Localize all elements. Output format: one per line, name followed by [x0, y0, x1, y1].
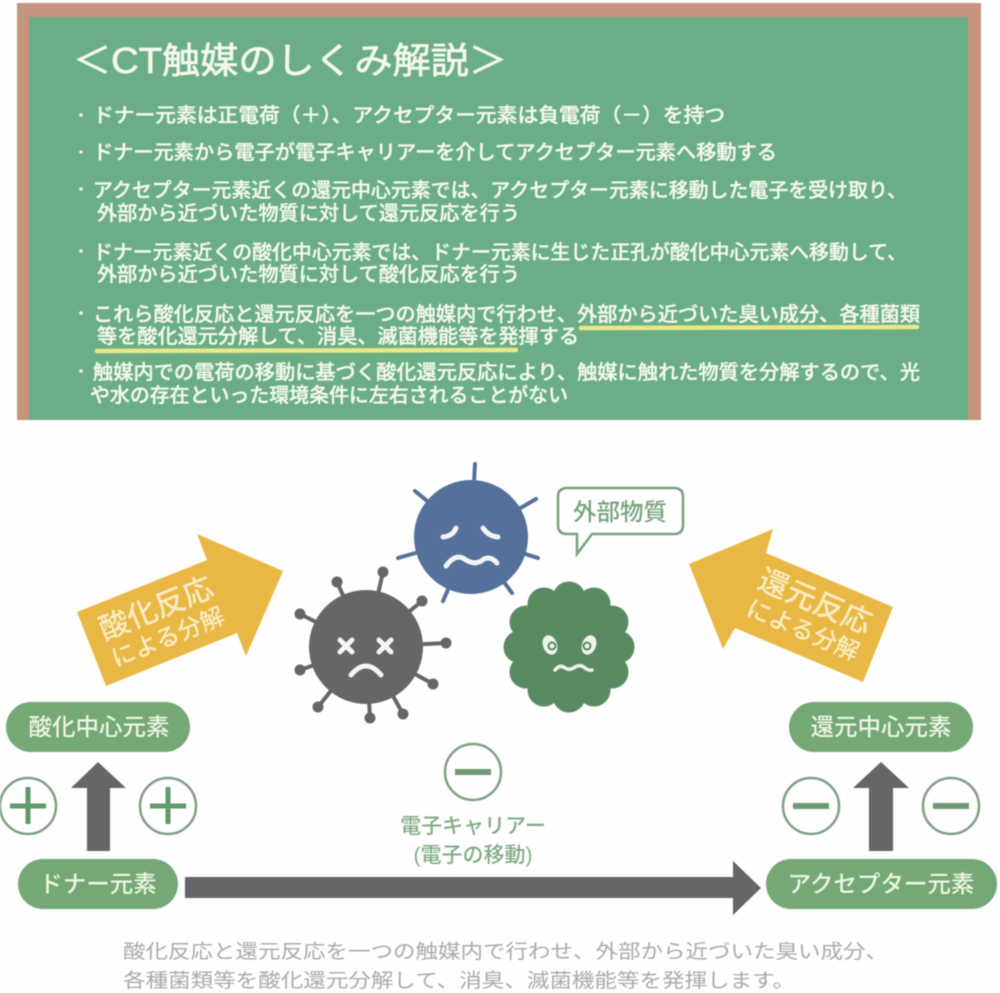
- arrow label: reduction: [742, 564, 876, 667]
- bullet text block: 等を酸化還元分解して、消臭、滅菌機能等を発揮する: [97, 325, 579, 348]
- bullet text block: ドナー元素は正電荷（＋）、アクセプター元素は負電荷（－）を持つ: [93, 104, 725, 127]
- panel: chalkboard explanation: [17, 3, 981, 420]
- pill: donor: [18, 859, 178, 909]
- pill: acceptor: [766, 859, 997, 909]
- icon: minus center: [445, 744, 501, 800]
- pill: reduction center: 還元中心元素: [810, 714, 952, 740]
- icon: blue germ: [398, 464, 538, 601]
- bullet text block: や水の存在といった環境条件に左右されることがない: [90, 384, 568, 407]
- icon: gray germ: [294, 566, 452, 724]
- callout: external substance: [558, 488, 683, 554]
- heading: ＜CT触媒のしくみ解説＞: [73, 40, 507, 81]
- bullet text block: [79, 104, 920, 407]
- icon: plus left: [0, 778, 56, 834]
- label: electron carrier: (電子の移動): [414, 844, 532, 867]
- arrow label: oxidation: [95, 571, 229, 673]
- bullet text block: アクセプター元素近くの還元中心元素では、アクセプター元素に移動した電子を受け取り、: [93, 179, 907, 202]
- arrow label: oxidation: 酸化反応: [95, 571, 218, 647]
- arrow: electron transfer: [185, 861, 761, 915]
- caption: 酸化反応と還元反応を一つの触媒内で行わせ、外部から近づいた臭い成分、: [123, 941, 888, 963]
- caption: 各種菌類等を酸化還元分解して、消臭、滅菌機能等を発揮します。: [123, 970, 795, 992]
- arrow: reduction reaction: [689, 529, 893, 682]
- icon: minus right: [923, 778, 979, 834]
- icon: green germ: [504, 582, 634, 712]
- arrow label: reduction: による分解: [742, 595, 863, 667]
- icon: minus left: [783, 778, 839, 834]
- bullet text block: ドナー元素から電子が電子キャリアーを介してアクセプター元素へ移動する: [93, 141, 777, 164]
- arrow label: reduction: 還元反応: [753, 564, 876, 641]
- bullet text block: これら酸化反応と還元反応を一つの触媒内で行わせ、外部から近づいた臭い成分、各種菌類: [93, 303, 920, 326]
- caption: [123, 941, 888, 992]
- highlight underlines: [97, 327, 917, 351]
- arrow label: oxidation: による分解: [108, 603, 228, 673]
- pill: oxidation center: [6, 702, 190, 752]
- icon: plus right: [140, 778, 196, 834]
- pill: reduction center: [789, 702, 973, 752]
- pill: acceptor: アクセプター元素: [788, 871, 974, 897]
- arrow: donor up: [71, 762, 126, 851]
- bullet text block: 外部から近づいた物質に対して還元反応を行う: [97, 202, 520, 225]
- bullet text block: 触媒内での電荷の移動に基づく酸化還元反応により、触媒に触れた物質を分解するので、光: [93, 361, 920, 384]
- pill: donor: ドナー元素: [39, 871, 157, 897]
- bullet text block: ドナー元素近くの酸化中心元素では、ドナー元素に生じた正孔が酸化中心元素へ移動して、: [93, 241, 907, 264]
- arrow: oxidation reaction: [77, 534, 283, 686]
- pill: oxidation center: 酸化中心元素: [28, 714, 170, 740]
- callout: external substance: 外部物質: [573, 499, 667, 525]
- label: electron carrier: [400, 815, 546, 867]
- bullet text block: 外部から近づいた物質に対して酸化反応を行う: [97, 263, 520, 286]
- label: electron carrier: 電子キャリアー: [400, 815, 546, 838]
- arrow: acceptor up: [853, 762, 909, 851]
